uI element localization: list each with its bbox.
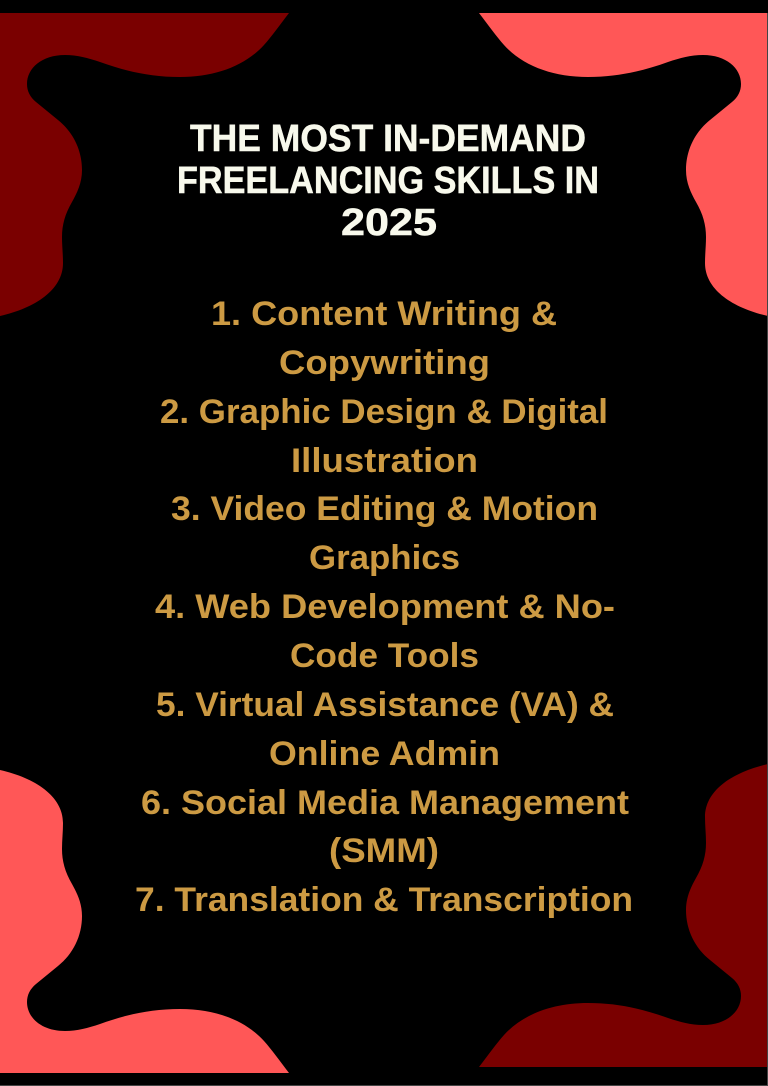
title: THE MOST IN-DEMAND <box>190 118 586 160</box>
skill 5: Online Admin <box>269 735 500 773</box>
skill 2 <box>160 393 608 480</box>
skill 4: Code Tools <box>290 637 479 675</box>
skill 3: Graphics <box>309 539 460 577</box>
skill 6: 6. Social Media Management <box>141 784 629 822</box>
blob: bottom-left coral corner <box>0 770 289 1073</box>
blob: top-left dark red corner <box>0 13 289 316</box>
blob: top-right coral corner <box>479 13 768 316</box>
skill 2: Illustration <box>291 442 478 480</box>
skill 6: (SMM) <box>329 832 439 870</box>
skill 1: 1. Content Writing & <box>211 295 557 333</box>
skill 5 <box>156 686 614 773</box>
skill 6 <box>141 784 629 870</box>
skill 3: 3. Video Editing & Motion <box>171 490 598 528</box>
title: FREELANCING SKILLS IN <box>177 160 599 202</box>
skill 4 <box>155 588 615 675</box>
skill 2: 2. Graphic Design & Digital <box>160 393 608 431</box>
skill 1: Copywriting <box>279 344 490 382</box>
skill 4: 4. Web Development & No- <box>155 588 615 626</box>
title: 2025 <box>341 202 437 244</box>
blob: bottom-right dark red corner <box>479 764 768 1067</box>
skills list <box>135 295 633 919</box>
skill 3 <box>171 490 598 577</box>
skill 7: 7. Translation & Transcription <box>135 881 633 919</box>
skill 1 <box>211 295 557 382</box>
title <box>177 118 599 244</box>
skill 5: 5. Virtual Assistance (VA) & <box>156 686 614 724</box>
